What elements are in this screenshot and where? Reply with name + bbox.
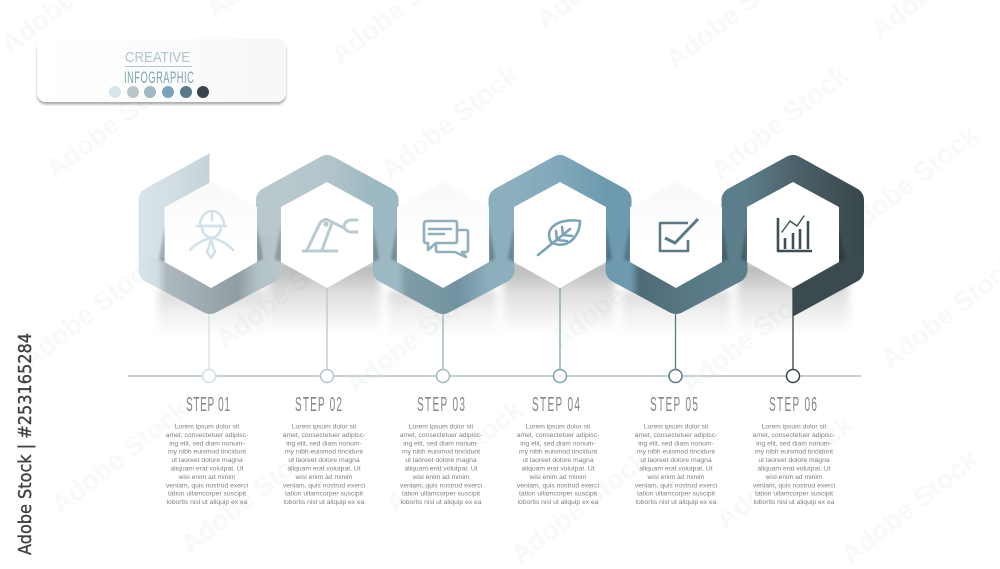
stock watermark pattern: Adobe Stock: [210, 229, 360, 355]
step 1 text: [166, 395, 249, 506]
step 1 body: tation ullamcorper suscipit: [168, 491, 246, 498]
step 2 body: ing elit, sed diam nonum-: [286, 440, 362, 447]
step 2 body: wisi enim ad minim: [294, 474, 353, 481]
step 4 body: wisi enim ad minim: [528, 474, 587, 481]
stock watermark pattern: Adobe Stock: [40, 59, 190, 185]
timeline nodes: [202, 370, 800, 382]
step 6 heading: STEP 06: [769, 395, 817, 416]
hexagon 6: [747, 182, 839, 288]
ribbon fold shadows: [159, 225, 845, 262]
hexagon 1: [165, 182, 257, 288]
step 4 body: lobortis nisl ut aliquip ex ea: [517, 499, 599, 506]
stock watermark pattern: Adobe Stock: [45, 394, 195, 520]
step 2 body: aliquam erat volutpat. Ut: [287, 466, 361, 472]
step 4 body: my nibh euismod tincidunt: [519, 449, 597, 456]
hexagon 3: [397, 182, 489, 288]
colour dots: [109, 86, 209, 98]
step 5 body: ing elit, sed diam nonum-: [638, 440, 714, 447]
step 2 heading: STEP 02: [295, 395, 342, 416]
step 6 body: ing elit, sed diam nonum-: [756, 440, 832, 447]
step 3 body: veniam, quis nostrud exerci: [400, 482, 483, 489]
stock watermark pattern: Adobe Stock: [375, 59, 525, 185]
step 5 body: [635, 424, 718, 506]
step 4 body: aliquam erat volutpat. Ut: [521, 466, 595, 472]
ribbon segment 2: [152, 230, 269, 301]
ribbon segment 7: [734, 168, 851, 262]
step 3 heading: STEP 03: [417, 395, 465, 416]
step 5 body: my nibh euismod tincidunt: [637, 449, 715, 456]
step 4 body: ut laoreet dolore magna: [522, 457, 594, 464]
step 5 body: Lorem ipsum dolor sit: [644, 424, 708, 430]
step 3 body: ut laoreet dolore magna: [405, 457, 477, 464]
step 6 body: my nibh euismod tincidunt: [755, 449, 833, 456]
step 2 text: [283, 395, 366, 506]
step 6 body: amet, consectetuer adipisc-: [753, 432, 835, 439]
step 2 body: ut laoreet dolore magna: [288, 457, 360, 464]
step 5 body: amet, consectetuer adipisc-: [635, 432, 717, 439]
hexagon ribbon: [152, 154, 851, 317]
hexagon 2: [281, 182, 373, 288]
step 1 body: amet, consectetuer adipisc-: [166, 432, 248, 439]
step 4 body: Lorem ipsum dolor sit: [526, 424, 590, 430]
ribbon segment 6: [618, 230, 734, 301]
step 2 body: veniam, quis nostrud exerci: [283, 482, 366, 489]
connector lines: [209, 288, 793, 369]
step 1 heading: STEP 01: [186, 395, 230, 416]
step 5 heading: STEP 05: [650, 395, 698, 416]
title: creative: CREATIVE: [125, 50, 190, 66]
ribbon segment 8: [793, 262, 864, 316]
step 2 body: Lorem ipsum dolor sit: [292, 424, 356, 430]
step 2 body: [283, 424, 366, 506]
stock watermark pattern: Adobe Stock: [710, 409, 860, 535]
step 1 body: aliquam erat volutpat. Ut: [170, 466, 244, 472]
timeline baseline: [128, 375, 861, 377]
step 6 text: [753, 395, 836, 506]
step 6 body: tation ullamcorper suscipit: [755, 491, 833, 498]
step 5 body: ut laoreet dolore magna: [640, 457, 712, 464]
stock watermark pattern: Adobe Stock: [175, 434, 325, 560]
step 1 body: ut laoreet dolore magna: [171, 457, 243, 464]
hexagon drop shadows: [158, 262, 849, 338]
step 2 body: tation ullamcorper suscipit: [285, 491, 363, 498]
step 6 body: veniam, quis nostrud exerci: [753, 482, 836, 489]
white hexagons: [165, 182, 839, 288]
stock watermark pattern: Adobe Stock: [380, 394, 530, 520]
stock watermark pattern: Adobe Stock: [15, 249, 165, 375]
step 3 body: Lorem ipsum dolor sit: [409, 424, 473, 430]
step 5 body: lobortis nisl ut aliquip ex ea: [635, 499, 717, 506]
step 4 body: veniam, quis nostrud exerci: [517, 482, 600, 489]
step 6 body: [753, 424, 836, 506]
step 2 body: lobortis nisl ut aliquip ex ea: [283, 499, 365, 506]
icon: robot arm: [303, 220, 357, 251]
step 5 body: veniam, quis nostrud exerci: [635, 482, 718, 489]
hexagon 5: [630, 182, 722, 288]
step 5 text: [635, 395, 718, 506]
stock watermark pattern: Adobe Stock: [835, 119, 985, 245]
stock watermark pattern: Adobe Stock: [705, 59, 855, 185]
icon: worker: [190, 211, 233, 258]
step 6 body: aliquam erat volutpat. Ut: [757, 466, 831, 472]
step 3 text: [400, 395, 483, 506]
step 4 heading: STEP 04: [532, 395, 580, 416]
ribbon segment 1: [138, 153, 210, 258]
card background: [37, 39, 286, 102]
step 1 body: [166, 424, 249, 506]
stock watermark pattern: Adobe Stock: [505, 444, 655, 569]
hexagon 4: [514, 182, 606, 288]
ribbon segment 3: [269, 168, 386, 240]
stock watermark pattern: Adobe Stock: [340, 274, 490, 400]
stock watermark pattern: Adobe Stock: [835, 444, 985, 569]
step 1 body: veniam, quis nostrud exerci: [166, 482, 249, 489]
ribbon segment 4: [386, 230, 502, 301]
step 5 body: wisi enim ad minim: [646, 474, 705, 481]
vertical stock id text: Adobe Stock | #253165284: [15, 333, 36, 555]
step 3 body: lobortis nisl ut aliquip ex ea: [400, 499, 482, 506]
ribbon segment 5: [502, 168, 618, 240]
step 6 body: ut laoreet dolore magna: [758, 457, 830, 464]
step 1 body: Lorem ipsum dolor sit: [175, 424, 239, 430]
title: infographic: INFOGRAPHIC: [124, 68, 194, 87]
step 4 body: ing elit, sed diam nonum-: [520, 440, 596, 447]
step 3 body: aliquam erat volutpat. Ut: [404, 466, 478, 472]
icon: chat bubbles: [424, 221, 468, 257]
step 6 body: lobortis nisl ut aliquip ex ea: [753, 499, 835, 506]
step 2 body: amet, consectetuer adipisc-: [283, 432, 365, 439]
step 1 body: lobortis nisl ut aliquip ex ea: [166, 499, 248, 506]
step 3 body: wisi enim ad minim: [411, 474, 470, 481]
step 6 body: wisi enim ad minim: [764, 474, 823, 481]
step 4 body: [517, 424, 600, 506]
step 4 body: amet, consectetuer adipisc-: [517, 432, 599, 439]
step 4 text: [517, 395, 600, 506]
icon: checkbox: [660, 219, 698, 251]
step 2 body: my nibh euismod tincidunt: [285, 449, 363, 456]
step 1 body: wisi enim ad minim: [177, 474, 236, 481]
title card: [37, 39, 286, 102]
icon: bar chart: [778, 216, 812, 251]
icon: leaf: [538, 220, 580, 255]
stock watermark pattern: Adobe Stock: [545, 229, 695, 355]
step 3 body: ing elit, sed diam nonum-: [403, 440, 479, 447]
step 5 body: aliquam erat volutpat. Ut: [639, 466, 713, 472]
step 1 body: my nibh euismod tincidunt: [168, 449, 246, 456]
step 3 body: tation ullamcorper suscipit: [402, 491, 480, 498]
step 3 body: [400, 424, 483, 506]
step 3 body: my nibh euismod tincidunt: [402, 449, 480, 456]
step 3 body: amet, consectetuer adipisc-: [400, 432, 482, 439]
step 5 body: tation ullamcorper suscipit: [637, 491, 715, 498]
step 1 body: ing elit, sed diam nonum-: [169, 440, 245, 447]
step 4 body: tation ullamcorper suscipit: [519, 491, 597, 498]
stock watermark pattern: Adobe Stock: [675, 274, 825, 400]
step 6 body: Lorem ipsum dolor sit: [762, 424, 826, 430]
